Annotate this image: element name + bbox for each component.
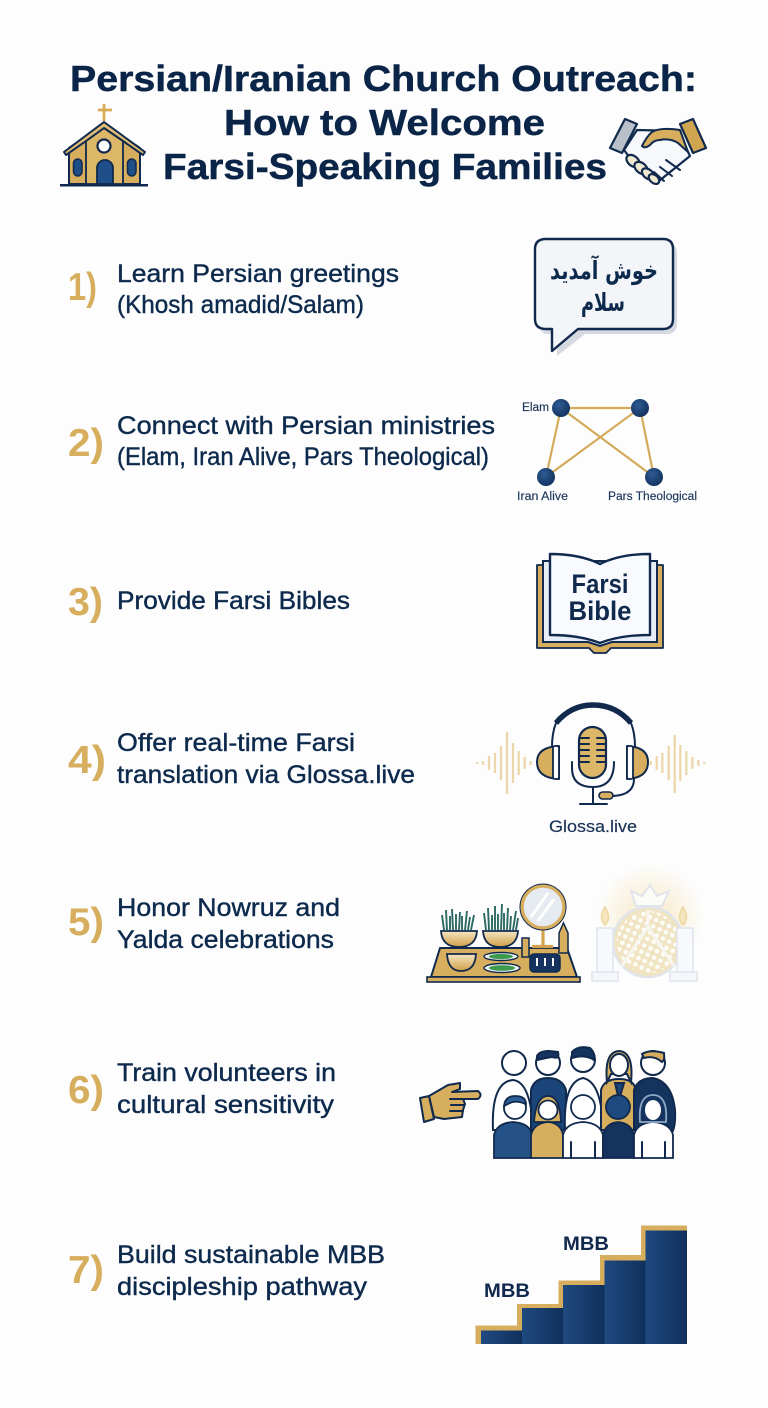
step 6 text: cultural sensitivity [117,1091,335,1119]
icon: speech bubble with Persian greeting: خوش آمدید [550,255,658,286]
icon: handshake [610,119,706,186]
title: Farsi-Speaking Families [163,146,607,187]
step 1 [68,239,677,356]
step 2 text: Connect with Persian ministries [117,412,495,440]
icon: ministry network: Iran Alive [517,491,568,503]
step 1 text: Learn Persian greetings [117,260,399,288]
icon: ministry network [517,399,697,503]
number 2: 2) [68,422,104,465]
step 6 [68,1047,675,1158]
step 7 text: discipleship pathway [117,1273,368,1301]
step 3 text: Provide Farsi Bibles [117,587,350,615]
step 6 text [117,1059,336,1119]
icon: church [60,104,148,186]
step 7 text: Build sustainable MBB [117,1241,385,1269]
icon: ministry network: Elam [522,402,549,414]
step 7 text [117,1241,385,1301]
chart: ascending staircase [476,1226,687,1344]
icon: group of volunteers [493,1047,675,1158]
icon: headset and microphone with sound waves: Glossa.live [549,817,637,836]
step 6 text: Train volunteers in [117,1059,336,1087]
title: Persian/Iranian Church Outreach: [70,58,697,99]
number 3: 3) [68,581,103,624]
step 4 [68,705,704,836]
number 1: 1) [68,266,97,309]
step 2 text: (Elam, Iran Alive, Pars Theological) [117,443,489,471]
number 5: 5) [68,901,104,944]
step 4 text: translation via Glossa.live [117,761,415,789]
title: How to Welcome [224,102,545,143]
step 1 text [117,260,399,319]
chart: ascending staircase: MBB [563,1234,609,1255]
icon: speech bubble with Persian greeting [535,239,677,356]
icon: Farsi Bible book [537,554,663,653]
icon: speech bubble with Persian greeting: سلام [581,288,625,317]
step 5 text [117,894,340,954]
step 5 text: Yalda celebrations [117,926,334,954]
step 7 [68,1226,687,1344]
step 4 text [117,729,415,789]
number 7: 7) [68,1249,104,1292]
icon: Nowruz haft-sin table [427,884,580,982]
step 2 [68,399,697,503]
chart: ascending staircase: MBB [484,1281,530,1302]
step 4 text: Offer real-time Farsi [117,729,355,757]
step 2 text [117,412,495,471]
number 6: 6) [68,1069,104,1112]
number 4: 4) [68,739,106,782]
icon: pointing hand [420,1083,480,1122]
icon: headset and microphone with sound waves [477,705,704,836]
icon: ministry network: Pars Theological [608,491,697,503]
step 3 [68,554,663,653]
icon: Yalda pomegranate and candles [592,863,705,981]
step 5 text: Honor Nowruz and [117,894,340,922]
icon: Farsi Bible book: Bible [568,596,632,626]
step 5 [68,863,705,982]
front row [494,1095,673,1158]
icon: Farsi Bible book: Farsi [572,569,628,599]
title [70,58,697,187]
back row [493,1047,675,1135]
step 1 text: (Khosh amadid/Salam) [117,291,364,319]
